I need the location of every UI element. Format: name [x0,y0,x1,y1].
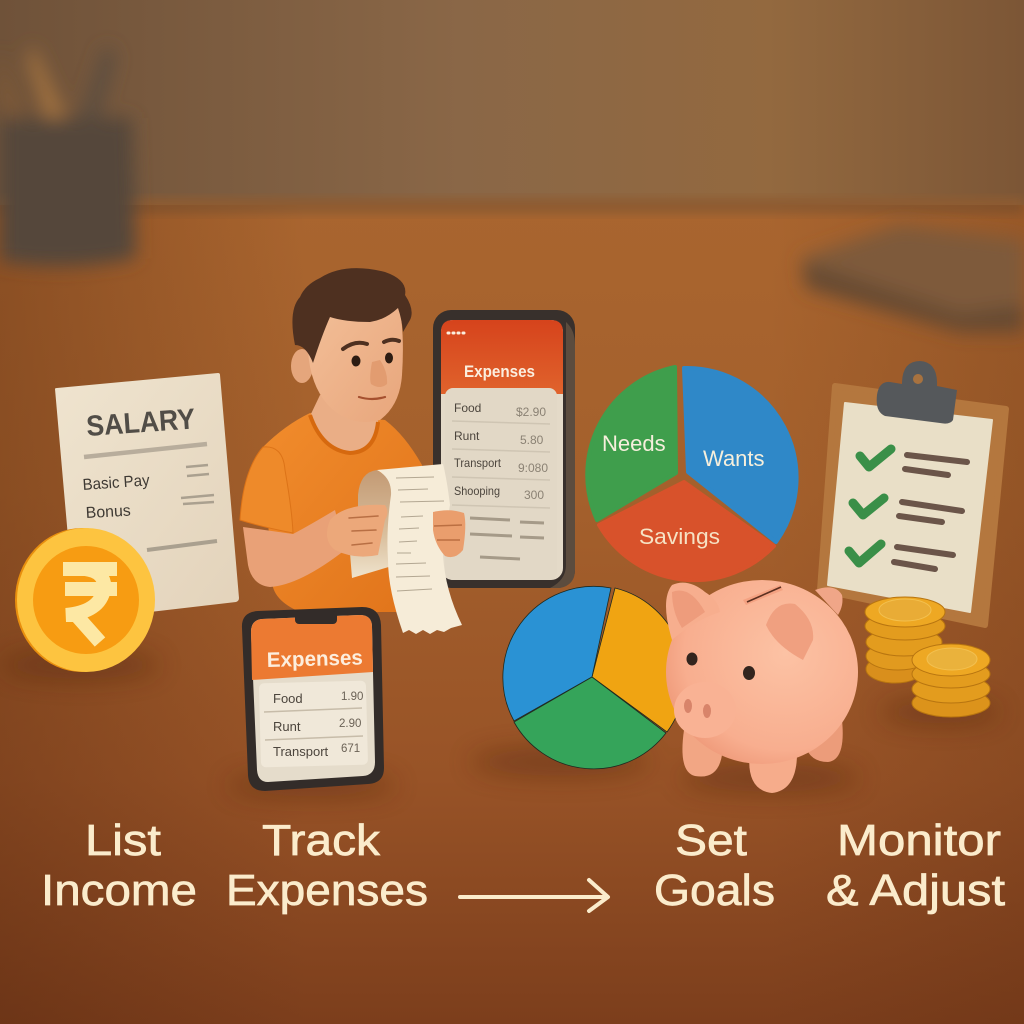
snout [674,682,736,738]
small phone rows: 2.90 [339,718,361,730]
torso [263,413,430,612]
slice: needs [587,367,676,520]
budget pie chart: Savings [639,524,720,549]
left ear [666,583,720,640]
step label: monitor and adjust [826,816,1005,915]
clip [877,361,957,424]
coin slot [743,585,783,605]
expense rows: $2.90 [516,405,546,419]
expense rows: 300 [524,488,544,502]
step label: list income [41,816,197,915]
eyes [686,652,698,666]
legs and back ear [682,730,722,777]
step label: monitor and adjust: & Adjust [826,866,1005,915]
slice: wants [684,368,797,542]
salary document [55,373,239,612]
slice: savings [599,482,774,580]
neck and head [291,268,412,453]
small phone rows: 671 [341,743,360,755]
pie labels: Needs [602,431,666,456]
blurred notebook [802,225,1024,332]
coin stacks [865,597,990,717]
expense rows: Transport [454,456,502,470]
salary lines: Basic Pay [82,472,150,494]
step label: list income: List [85,816,161,865]
small phone rows: Transport [273,744,329,759]
arrow [460,880,608,911]
large phone: expenses [433,310,575,588]
step label: list income: Income [41,866,197,915]
step label: set goals: Goals [654,866,775,915]
right ear [766,603,813,660]
salary heading: SALARY [85,403,196,443]
hands [327,505,465,557]
receipt [350,464,462,634]
expense rows [454,401,548,502]
person reading receipt [240,268,430,612]
status dots [448,332,464,334]
icon: rupee coin [15,528,155,672]
expense rows: Shooping [454,484,500,498]
arm [243,510,345,587]
expense rows: 5.80 [520,433,544,447]
small phone rows [273,691,363,759]
small phone: expenses [242,607,384,791]
expense rows: Food [454,401,481,415]
sleeve [240,447,293,533]
budget pie chart [587,367,797,580]
budget pie chart: Wants [703,446,765,471]
step label: set goals [654,816,775,915]
small phone heading: Expenses [267,646,363,672]
expense rows: Runt [454,429,480,443]
step label: track expenses [226,816,428,915]
blurred pencil cup [0,45,136,266]
piggy bank [666,580,858,793]
small pie chart [503,586,685,769]
step label: set goals: Set [675,816,747,865]
shadows on desk [0,651,1000,797]
check marks [849,449,891,563]
phone heading: Expenses [464,362,535,381]
salary document: Bonus [85,503,131,522]
step label: track expenses: Expenses [226,866,428,915]
check list lines [894,455,967,569]
small phone rows: 1.90 [341,691,363,703]
step label: monitor and adjust: Monitor [837,816,1001,865]
small phone rows: Food [273,691,303,706]
step label: track expenses: Track [262,816,381,865]
clipboard checklist [820,361,1006,625]
expense rows: 9:080 [518,461,548,475]
small phone rows: Runt [273,719,301,734]
